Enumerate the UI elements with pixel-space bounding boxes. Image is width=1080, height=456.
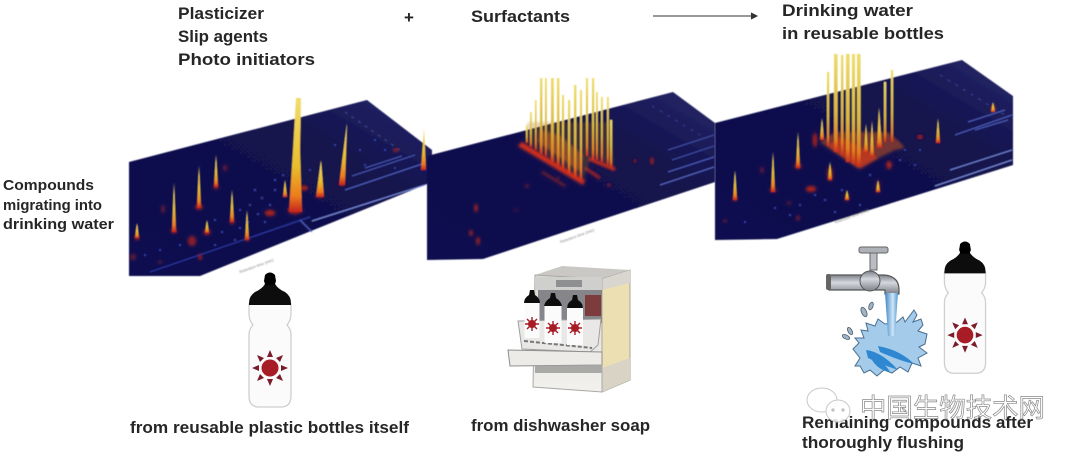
watermark: site name: 中国生物技术网	[860, 393, 1045, 423]
heading: plasticizer list: Slip agents	[178, 27, 268, 46]
heading: drinking water in reusable bottles	[782, 1, 944, 43]
arrow	[653, 13, 757, 19]
chart panel 1: compounds from plastic bottle	[129, 98, 432, 276]
caption: from dishwasher soap: from dishwasher soap	[471, 416, 650, 435]
dishwasher rack	[518, 319, 601, 352]
icon: reusable bottle	[249, 272, 291, 407]
ridge of surfactant peaks	[518, 78, 616, 185]
side label: compounds migrating into drinking water	[3, 177, 114, 233]
caption: remaining compounds after flushing: thoroughly flushing	[802, 433, 964, 452]
axis labels: Retention time (min)	[239, 257, 275, 274]
heading: surfactants: Surfactants	[471, 7, 570, 26]
axis labels: Retention time (min)	[559, 227, 595, 244]
watermark: chat icon	[807, 388, 850, 422]
side label: compounds migrating into drinking water: migrating into	[3, 197, 102, 214]
heading: drinking water in reusable bottles: Drinking water	[782, 1, 913, 20]
heading: plasticizer list: Plasticizer	[178, 4, 264, 23]
mini bottles	[524, 290, 583, 345]
caption: remaining compounds after flushing: Remaining compounds after	[802, 413, 1033, 432]
heading: plasticizer list: Photo initiators	[178, 50, 315, 69]
side label: compounds migrating into drinking water: drinking water	[3, 216, 114, 233]
caption: remaining compounds after flushing	[802, 413, 1033, 452]
heading: drinking water in reusable bottles: in reusable bottles	[782, 24, 944, 43]
caption: from reusable plastic bottles: from reusable plastic bottles itself	[130, 418, 409, 437]
side label: compounds migrating into drinking water: Compounds	[3, 177, 94, 194]
heading: plasticizer list	[178, 4, 315, 69]
chart panel 2: compounds from dishwasher soap	[427, 78, 715, 260]
icon: running tap and water splash	[826, 247, 927, 376]
axis labels: Retention time (min)	[834, 207, 870, 225]
icon: bottle after flushing	[944, 241, 986, 373]
chart panel 3: remaining compounds after flushing	[715, 54, 1013, 240]
dishwasher door	[508, 350, 602, 366]
plus sign: +	[404, 8, 414, 27]
icon: dishwasher with bottles	[508, 266, 630, 392]
